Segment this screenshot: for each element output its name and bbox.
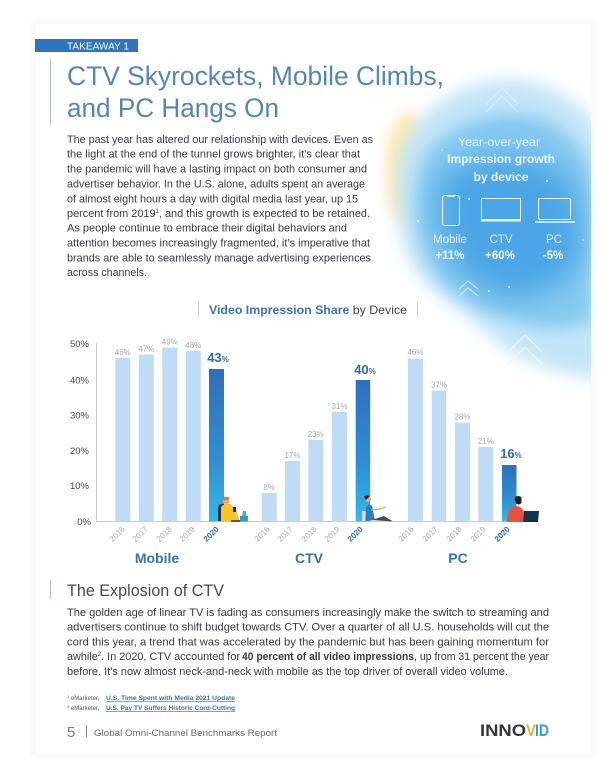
group: Mobile: 2016 [108, 524, 127, 544]
intro text block: the pandemic will have a lasting impact on both consumer and [67, 164, 367, 176]
intro text block: the light at the end of the tunnel grows brighter, it’s clear that [67, 148, 360, 160]
group: CTV: 2016 [253, 524, 272, 544]
group: PC: 37% [431, 380, 447, 390]
icon: person with phone [218, 497, 248, 522]
group: Mobile: 46% [115, 348, 131, 357]
CTV body text [67, 607, 549, 678]
CTV body text: . In 2020, CTV accounted for [101, 651, 240, 663]
PC stat: -5% [543, 250, 563, 262]
intro text block: 1 [156, 209, 160, 215]
axes: 20% [70, 446, 90, 457]
group: CTV [253, 362, 376, 566]
mobile stat: Mobile [433, 234, 467, 246]
group: Mobile [108, 338, 229, 566]
PC stat: PC [546, 234, 562, 246]
footnotes: U.S. Pay TV Suffers Historic Cord-Cutting [106, 705, 235, 712]
group: PC: 2019 [469, 524, 488, 544]
group: CTV: CTV [295, 550, 324, 566]
group: PC: 2016 [397, 524, 416, 544]
CTV stat [485, 234, 515, 262]
icon: person on floor [362, 495, 393, 522]
mobile stat [433, 234, 467, 262]
chevron: top [486, 88, 518, 112]
group: CTV: 2020 [346, 524, 365, 544]
group: Mobile: 2018 [155, 524, 174, 544]
group: Mobile: 2020 [202, 524, 221, 544]
group: CTV: 2017 [276, 524, 295, 544]
intro text block: As people continue to embrace their digital behaviors and [67, 222, 347, 234]
group: PC: 2017 [421, 524, 440, 544]
group: PC [397, 348, 522, 566]
group: CTV: 2018 [300, 524, 319, 544]
section heading: The Explosion of CTV [67, 582, 224, 600]
intro text block: , and this growth is expected to be retained. [159, 208, 370, 220]
group: CTV: 23% [308, 430, 324, 439]
footnotes: U.S. Time Spent with Media 2021 Update [106, 695, 235, 702]
callout heading: by device [474, 170, 529, 184]
chevron: middle [459, 281, 478, 296]
group: PC: PC [448, 550, 468, 566]
footnotes [67, 694, 235, 712]
axes: 0% [77, 517, 92, 528]
group: Mobile: Mobile [135, 550, 179, 566]
axes [70, 339, 530, 528]
group: Mobile: 48% [185, 341, 201, 350]
group: PC: 28% [454, 412, 471, 422]
intro text block: advertiser behavior. In the U.S. alone, adults spent an average [67, 178, 365, 190]
CTV body text: before. It’s now almost neck-and-neck with mobile as the top driver of overall video volume. [67, 666, 508, 678]
chevron: bottom [508, 335, 542, 364]
CTV body text: 40 percent of all video impressions [242, 651, 414, 663]
group: Mobile: 47% [138, 344, 154, 354]
group: Mobile: 2019 [178, 524, 197, 544]
intro text block: attention becomes increasingly fragmented, it’s imperative that [67, 238, 370, 250]
blue gradient blob panel [386, 80, 610, 378]
axes: 40% [70, 376, 90, 386]
logo: Innovid: INNO [480, 721, 526, 740]
mobile stat: +11% [435, 250, 465, 262]
intro text block: brands are able to seamlessly manage advertising experiences [67, 252, 372, 264]
axes: 10% [70, 481, 90, 492]
group: PC: 21% [478, 437, 494, 446]
intro text block: percent from 2019 [67, 208, 155, 220]
callout heading [447, 135, 555, 184]
callout heading: Impression growth [447, 152, 555, 166]
logo: Innovid [480, 721, 549, 740]
group: PC: 16% [500, 446, 522, 461]
sparkles [417, 149, 584, 292]
footer: Global Omni-Channel Benchmarks Report [94, 728, 277, 739]
bar chart [70, 338, 539, 566]
group: PC: 2020 [493, 524, 512, 544]
group: CTV: 31% [331, 402, 348, 411]
footer [67, 724, 277, 741]
group: Mobile: 49% [162, 338, 178, 346]
intro text block: of almost eight hours a day with digital media last year, up 15 [67, 194, 358, 206]
icon: laptop [535, 198, 575, 222]
group: CTV: 40% [354, 362, 376, 377]
footnotes: 2 [67, 704, 70, 709]
CTV stat: CTV [490, 234, 513, 246]
intro text block: across channels. [67, 267, 147, 279]
callout heading: Year-over-year [458, 135, 540, 149]
title [50, 59, 444, 125]
growth callout [433, 135, 575, 262]
icon: TV [481, 198, 521, 220]
group: Mobile: 2017 [131, 524, 150, 544]
logo: Innovid: ID [535, 721, 549, 740]
footnotes: eMarketer, [69, 696, 100, 702]
section tag [35, 39, 138, 52]
CTV body text: , up from 31 percent the year [414, 651, 549, 663]
CTV body text: cord this year, a trend that was accelerated by the pandemic but has been gaining momentum for [67, 636, 549, 648]
group: CTV: 8% [263, 483, 275, 492]
intro text block [67, 134, 374, 279]
group: CTV: 17% [284, 451, 301, 460]
group: CTV: 2019 [323, 524, 342, 544]
footnotes: eMarketer, [69, 706, 100, 712]
CTV body text: advertisers continue to shift budget towards CTV. Over a quarter of all U.S. households will cut the [67, 622, 549, 634]
footer: 5 [67, 724, 75, 741]
icon: phone [442, 196, 460, 226]
CTV body text: 2 [98, 652, 102, 658]
chart title: Video Impression Share by Device [209, 303, 407, 317]
PC stat [543, 234, 563, 262]
group: Mobile: 43% [207, 350, 229, 365]
group: PC: 2018 [445, 524, 464, 544]
title: CTV Skyrockets, Mobile Climbs, [67, 61, 444, 91]
intro text block: The past year has altered our relationship with devices. Even as [67, 134, 374, 146]
CTV body text: awhile [67, 651, 98, 663]
footnotes: 1 [67, 694, 70, 699]
CTV body text: The golden age of linear TV is fading as consumers increasingly make the switch to streaming and [67, 607, 549, 619]
logo: Innovid: V [526, 721, 537, 740]
group: PC: 46% [407, 348, 424, 357]
icon: person with laptop [507, 496, 539, 522]
title: and PC Hangs On [67, 93, 279, 123]
axes: 50% [70, 339, 90, 350]
axes: 30% [70, 410, 90, 422]
section tag: TAKEAWAY 1 [67, 40, 129, 52]
CTV stat: +60% [485, 250, 515, 262]
